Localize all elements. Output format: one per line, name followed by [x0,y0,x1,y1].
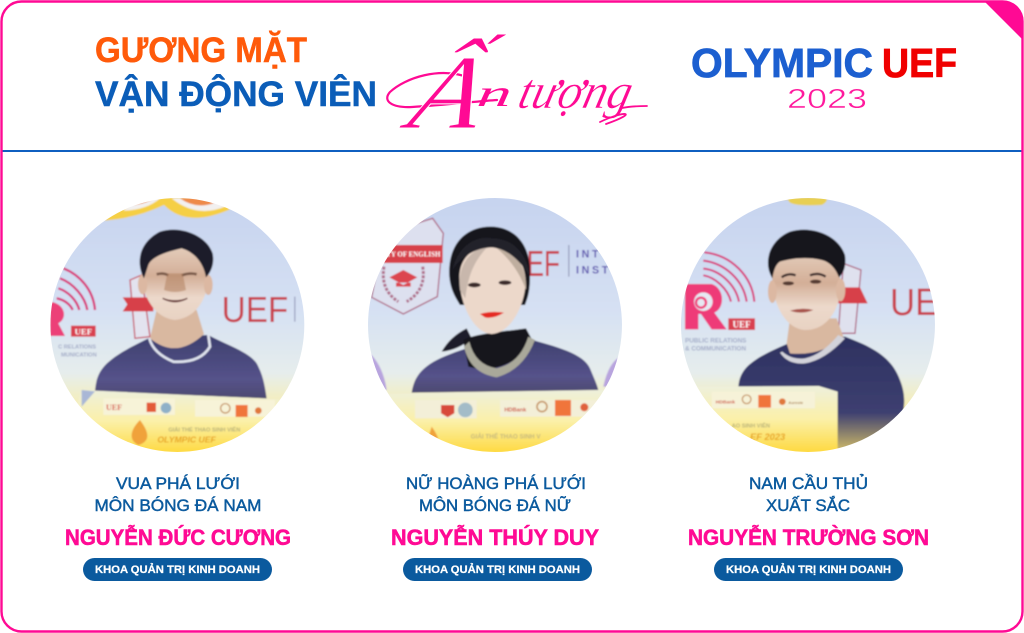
title: script words [387,33,647,152]
title: left heading: GƯƠNG MẶT [95,31,307,70]
title: script words: n [475,73,515,115]
role text: MÔN BÓNG ĐÁ NAM [94,496,262,515]
photo: Nguyễn Đức Cương [47,197,310,460]
photo: Nguyễn Trường Sơn [678,197,942,460]
photo: Nguyễn Thúy Duy: HDBank [504,408,527,414]
faculty pill: KHOA QUẢN TRỊ KINH DOANH [415,563,580,576]
role text: VUA PHÁ LƯỚI [116,474,240,493]
event logo: Olympic UEF 2023: 2023 [787,83,867,114]
role text: NỮ HOÀNG PHÁ LƯỚI [406,473,586,493]
photo: Nguyễn Trường Sơn: UEF [733,319,751,329]
corner accent [985,2,1022,39]
role text [749,474,868,515]
photo: Nguyễn Đức Cương: MUNICATION [61,352,97,358]
photo: Nguyễn Trường Sơn: Aureole [788,400,804,405]
photo: Nguyễn Trường Sơn: PUBLIC RELATIONS [685,337,746,344]
role text: XUẤT SẮC [766,496,850,515]
faculty pill: KHOA QUẢN TRỊ KINH DOANH [95,563,260,576]
photo: Nguyễn Đức Cương: UEF [222,289,288,330]
photo: Nguyễn Trường Sơn: UE [890,281,938,324]
photo: Nguyễn Đức Cương: OLYMPIC UEF [157,435,217,445]
title: script words: Ấ [392,33,507,152]
photo: Nguyễn Trường Sơn: AO SINH VIÊN [732,421,770,429]
photo: Nguyễn Đức Cương: UEF [106,403,122,412]
event logo: Olympic UEF 2023 [691,40,957,114]
photo: Nguyễn Trường Sơn: HDBank [716,399,735,405]
title: left heading [95,31,377,114]
photo: Nguyễn Thúy Duy: TY OF ENGLISH [386,251,441,259]
photo: Nguyễn Thúy Duy: EF [527,243,560,284]
event logo: Olympic UEF 2023: UEF [882,40,957,86]
athlete name: NGUYỄN ĐỨC CƯƠNG [65,524,291,550]
faculty pill: KHOA QUẢN TRỊ KINH DOANH [726,563,891,576]
photo: Nguyễn Thúy Duy: INT [576,249,601,261]
photo: Nguyễn Trường Sơn: & COMMUNICATION [685,345,746,352]
photo: Nguyễn Thúy Duy [365,197,628,460]
role text [94,474,262,515]
panel: athlete 2 [365,197,628,581]
photo: Nguyễn Thúy Duy: INST [576,264,611,276]
faculty pill [83,558,272,581]
panel: athlete 1 [47,197,310,581]
title: script words: tượng [513,64,639,119]
athlete name: NGUYỄN TRƯỜNG SƠN [688,524,929,550]
event logo: Olympic UEF 2023: OLYMPIC [691,40,873,86]
photo: Nguyễn Thúy Duy: GIẢI THỂ THAO SINH V [471,432,541,441]
role text: NAM CẦU THỦ [749,474,868,493]
photo: Nguyễn Trường Sơn: EF 2023 [750,432,786,442]
header divider line [2,150,1022,152]
faculty pill [403,558,592,581]
photo: Nguyễn Đức Cương: UEF [75,326,92,336]
role text: MÔN BÓNG ĐÁ NỮ [419,495,571,515]
faculty pill [714,558,903,581]
title: left heading: VẬN ĐỘNG VIÊN [95,74,377,114]
athlete name: NGUYỄN THÚY DUY [391,524,599,550]
photo: Nguyễn Đức Cương: C RELATIONS [58,345,96,351]
role text [406,473,586,515]
photo: Nguyễn Đức Cương: GIẢI THỂ THAO SINH VIÊN [168,426,240,434]
panel: athlete 3 [678,197,942,581]
